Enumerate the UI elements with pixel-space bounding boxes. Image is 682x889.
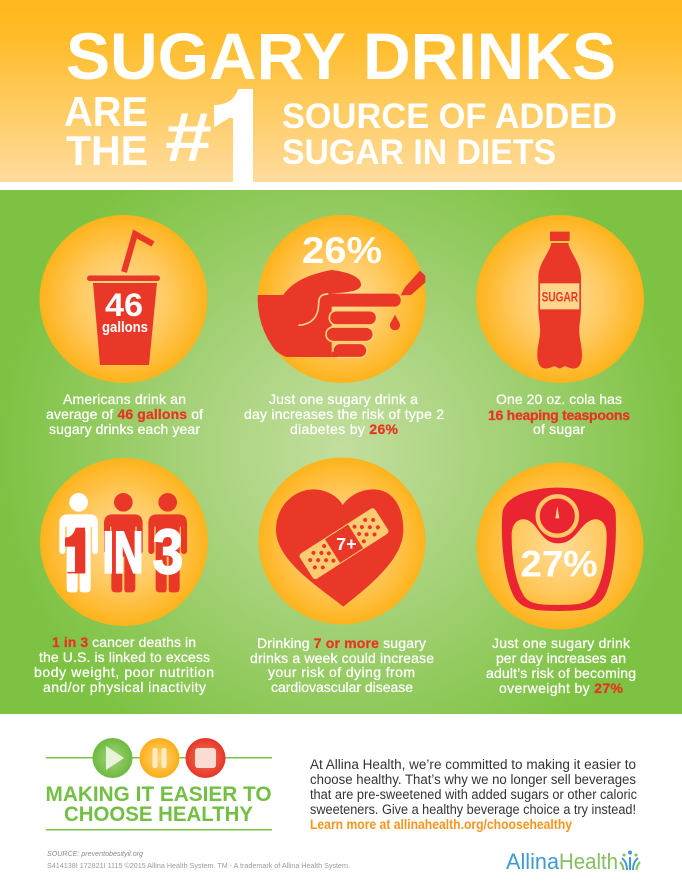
text block: commitment: Learn more at allinahealth.org/choosehealthy [310, 817, 572, 832]
logo: allina health [506, 849, 640, 874]
panel: cola sugar [476, 215, 644, 437]
heading: making it easier to choose healthy [46, 783, 272, 826]
icon: cup with straw [87, 234, 160, 365]
text block: commitment: sweeteners. Give a healthy beverage choice a try instead! [310, 802, 636, 817]
icon: three people [59, 493, 187, 594]
caption [486, 635, 636, 696]
caption: Americans drink an [63, 391, 186, 407]
icon: allina people mark [620, 850, 640, 870]
panel: 27 percent [476, 462, 644, 696]
caption [488, 391, 630, 437]
icon: cup with straw: 46 [105, 287, 143, 323]
heading: making it easier to choose healthy: CHOOSE HEALTHY [64, 803, 253, 826]
icon: three people: IN [103, 521, 143, 586]
heading: source of added sugar [282, 97, 617, 172]
icon: stop button [186, 738, 226, 778]
caption: 1 in 3 cancer deaths in [52, 634, 196, 650]
panel: header [0, 0, 682, 182]
stat: 26%: 26% [302, 230, 382, 271]
title: SUGARY DRINKS [66, 19, 616, 93]
icon: bathroom scale: 27% [520, 544, 598, 585]
circle badge [258, 215, 426, 383]
icon: heart with bandage: 7+ [336, 534, 357, 554]
caption: your risk of dying from [268, 664, 415, 680]
logo: allina health: Allina [506, 849, 559, 874]
circle badge [476, 462, 644, 630]
panel: footer campaign [46, 738, 640, 874]
caption: 16 heaping teaspoons [488, 407, 630, 423]
caption: One 20 oz. cola has [496, 391, 622, 407]
icon: soda bottle: SUGAR [542, 288, 578, 304]
icon: bathroom scale [502, 488, 616, 611]
caption [244, 391, 444, 437]
logo: allina health: Health [559, 849, 618, 874]
caption: and/or physical inactivity [43, 679, 206, 695]
caption: the U.S. is linked to excess [39, 649, 210, 665]
caption: body weight, poor nutrition [34, 664, 214, 680]
icon: finger prick [253, 270, 425, 358]
icon: soda bottle [537, 232, 582, 369]
caption: cardiovascular disease [271, 679, 413, 695]
text block: commitment [310, 757, 637, 832]
caption: diabetes by 26% [290, 421, 399, 437]
panel: 46 gallons [40, 215, 208, 437]
heading: source of added sugar: SOURCE OF ADDED [282, 97, 617, 136]
caption: overweight by 27% [499, 680, 624, 696]
heading: source of added sugar: SUGAR IN DIETS [282, 133, 556, 172]
caption: Just one sugary drink [492, 635, 631, 651]
heading: are the: ARE [64, 88, 148, 135]
copyright note: S414138I 172821I 1115 ©2015 Allina Health System. TM - A trademark of Allina Health System. [47, 862, 350, 870]
circle badge [476, 215, 644, 383]
caption: per day increases an [496, 650, 626, 666]
caption [250, 635, 434, 695]
heading: are the: THE [66, 127, 148, 174]
caption: Just one sugary drink a [269, 391, 418, 407]
panel: green statistics background [0, 190, 682, 714]
icon: play button [92, 738, 132, 778]
caption: Drinking 7 or more sugary [257, 635, 426, 651]
icon: pause button [140, 738, 180, 778]
heading: number one [166, 89, 253, 182]
caption: average of 46 gallons of [46, 406, 203, 422]
caption: drinks a week could increase [250, 650, 434, 666]
caption: of sugar [533, 421, 585, 437]
heading: making it easier to choose healthy: MAKING IT EASIER TO [46, 783, 272, 806]
panel: 26 percent [244, 215, 444, 437]
source note: SOURCE: preventobesityil.org [47, 849, 144, 858]
heading: are the [64, 88, 148, 174]
icon: three people: 1 [63, 516, 102, 594]
caption: day increases the risk of type 2 [244, 406, 444, 422]
text block: commitment: that are pre-sweetened with added sugars or other caloric [310, 787, 637, 802]
icon: cup with straw: gallons [102, 319, 148, 336]
panel: 7 or more [250, 458, 434, 695]
heading: number one: # [165, 98, 212, 176]
caption: sugary drinks each year [49, 421, 200, 437]
panel: 1 in 3 [34, 458, 214, 695]
caption: adult’s risk of becoming [486, 665, 636, 681]
logo: making it easier [46, 738, 272, 830]
caption [46, 391, 203, 437]
circle badge [40, 458, 208, 626]
circle badge [40, 215, 208, 383]
icon: three people: 3 [153, 518, 183, 588]
circle badge [258, 458, 426, 624]
icon: heart with bandage [276, 489, 403, 607]
text block: commitment: At Allina Health, we’re committed to making it easier to [310, 757, 636, 772]
text block: commitment: choose healthy. That’s why we no longer sell beverages [310, 772, 636, 787]
heading: number one: 1 [203, 65, 284, 227]
caption [34, 634, 214, 695]
